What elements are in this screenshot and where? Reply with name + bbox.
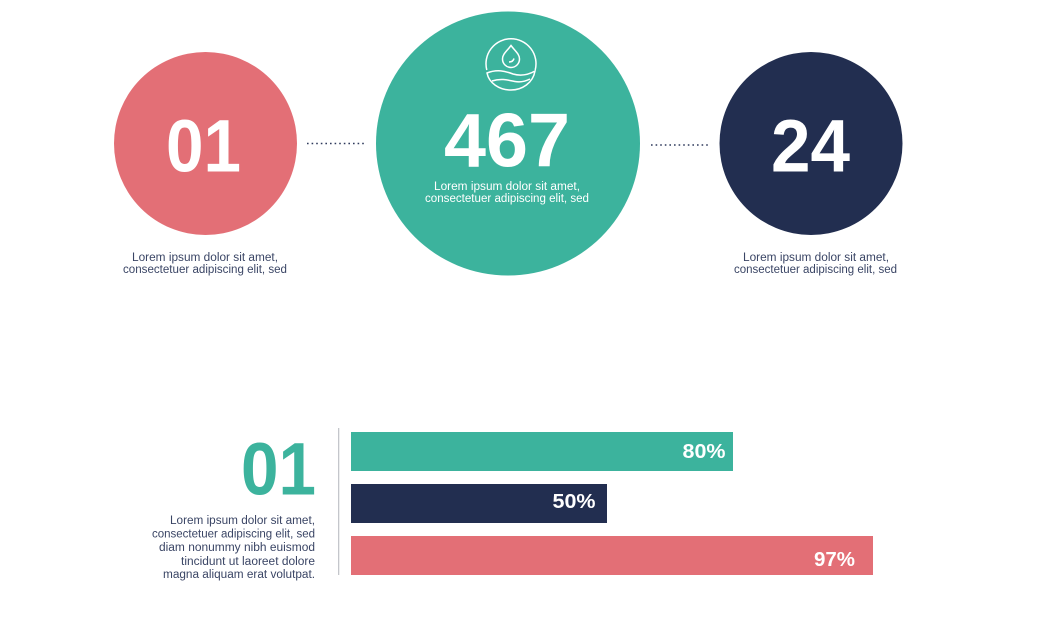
caption: navy circle	[734, 252, 897, 276]
panel: navy circle 24: 24	[771, 104, 850, 188]
bar: 80%: 80%	[682, 441, 726, 463]
text block: bar chart description: diam nonummy nibh euismod	[159, 542, 315, 554]
caption: red circle: consectetuer adipiscing elit, sed	[123, 264, 287, 276]
panel: green circle 467	[376, 12, 640, 276]
panel: navy circle 24	[720, 52, 902, 235]
panel: green circle 467: Lorem ipsum dolor sit amet,	[434, 181, 580, 193]
heading: green 01: 01	[241, 428, 316, 510]
panel: red circle 01: 01	[166, 104, 241, 188]
connector: left dotted line	[307, 142, 365, 144]
caption: navy circle: consectetuer adipiscing elit, sed	[734, 264, 897, 276]
panel: green circle 467: 467	[444, 98, 570, 184]
text block: bar chart description: Lorem ipsum dolor sit amet,	[170, 515, 315, 527]
caption: red circle	[123, 252, 287, 276]
connector: right dotted line	[651, 144, 709, 146]
caption: navy circle: Lorem ipsum dolor sit amet,	[743, 252, 889, 264]
bar: 97%: 97%	[814, 549, 855, 571]
bar: 80%	[351, 432, 733, 471]
text block: bar chart description: magna aliquam erat volutpat.	[163, 569, 315, 581]
divider	[338, 428, 339, 575]
panel: green circle 467: consectetuer adipiscing elit, sed	[425, 193, 589, 205]
bar: 97%	[351, 536, 873, 575]
bar: 50%: 50%	[552, 491, 596, 513]
text block: bar chart description	[152, 515, 315, 581]
bar: 50%	[351, 484, 607, 523]
panel: red circle 01	[114, 52, 297, 235]
text block: bar chart description: consectetuer adipiscing elit, sed	[152, 528, 315, 540]
bar chart	[351, 432, 873, 575]
caption: red circle: Lorem ipsum dolor sit amet,	[132, 252, 278, 264]
icon: water drop over waves	[486, 39, 536, 90]
text block: bar chart description: tincidunt ut laoreet dolore	[181, 556, 315, 568]
